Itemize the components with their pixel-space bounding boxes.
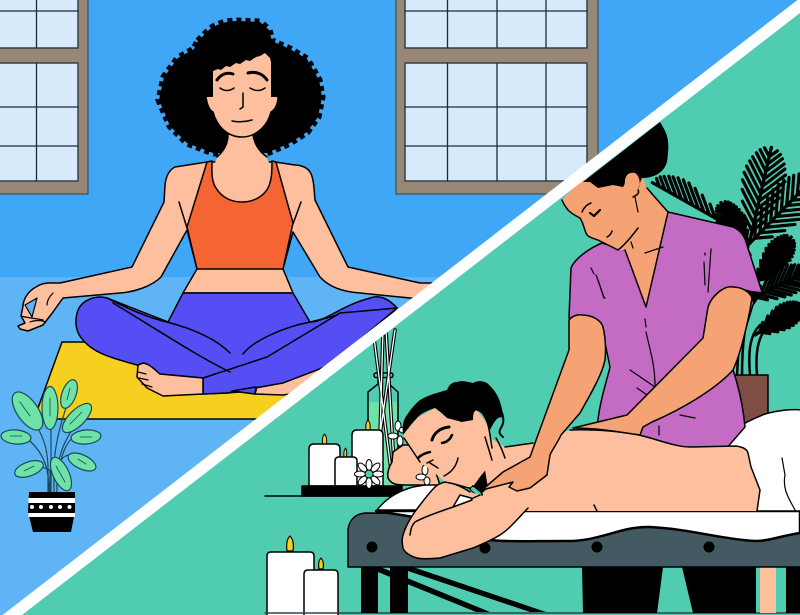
window: left — [0, 0, 88, 194]
therapist face features — [582, 203, 612, 237]
pot — [28, 492, 75, 532]
bed sheet — [376, 511, 800, 541]
far foot — [255, 362, 330, 395]
figure: meditating woman — [18, 21, 440, 396]
necklace — [472, 488, 480, 495]
palm stems — [736, 324, 764, 374]
client ear and neck — [477, 410, 505, 460]
ear line — [633, 190, 639, 197]
hair: afro — [159, 21, 322, 153]
hair and bun — [583, 122, 668, 190]
towel — [730, 408, 800, 510]
leaves — [6, 387, 49, 435]
leaf veins — [10, 388, 92, 482]
therapist near arms — [482, 287, 762, 491]
face outline — [562, 200, 638, 250]
trouser folds — [107, 298, 337, 372]
finger ring — [25, 298, 37, 317]
scene: massage — [265, 122, 800, 615]
crop top — [187, 161, 293, 269]
yoga mat — [34, 342, 340, 419]
torso and arms — [18, 162, 440, 331]
necklace band — [473, 489, 479, 494]
face — [206, 53, 278, 137]
trousers — [76, 293, 397, 394]
near foot — [137, 363, 203, 396]
front candles — [265, 536, 800, 615]
stems — [30, 405, 76, 492]
sleeve cuff shadow — [735, 287, 762, 305]
candles on tray — [309, 420, 383, 486]
neck and v-neck lines — [625, 188, 668, 307]
daisy flower — [354, 460, 384, 488]
near shin cover — [203, 308, 397, 394]
massage table legs — [361, 566, 800, 613]
client arm outline — [402, 482, 528, 559]
palm plant — [652, 143, 800, 375]
window: right — [396, 0, 598, 194]
tunic seams — [591, 249, 711, 435]
client neck shadow — [474, 470, 488, 493]
tunic — [569, 212, 762, 450]
tray and shelf line — [265, 486, 402, 496]
therapist legs — [582, 567, 776, 613]
therapist left arm — [482, 315, 606, 491]
client face outline — [404, 438, 470, 488]
pillow — [376, 486, 436, 510]
pillow tuft — [453, 495, 472, 507]
palm pot — [735, 375, 768, 430]
client back outline — [505, 430, 760, 511]
plant: potted leaves — [0, 378, 102, 532]
forearm under head — [388, 445, 440, 485]
therapist — [562, 122, 762, 450]
client head — [403, 381, 505, 488]
reeds — [373, 330, 395, 480]
flowers near head — [388, 421, 430, 485]
client face features — [432, 427, 449, 440]
diffuser bottle — [368, 330, 398, 486]
palm fronds — [652, 143, 800, 345]
client near arm — [402, 482, 528, 559]
hair wisp — [497, 405, 503, 437]
client body — [470, 430, 760, 511]
therapist right arm — [573, 287, 752, 435]
head and neck skin — [562, 170, 668, 307]
client hair — [403, 381, 503, 435]
massage table — [348, 513, 800, 567]
towel folds — [782, 458, 795, 510]
